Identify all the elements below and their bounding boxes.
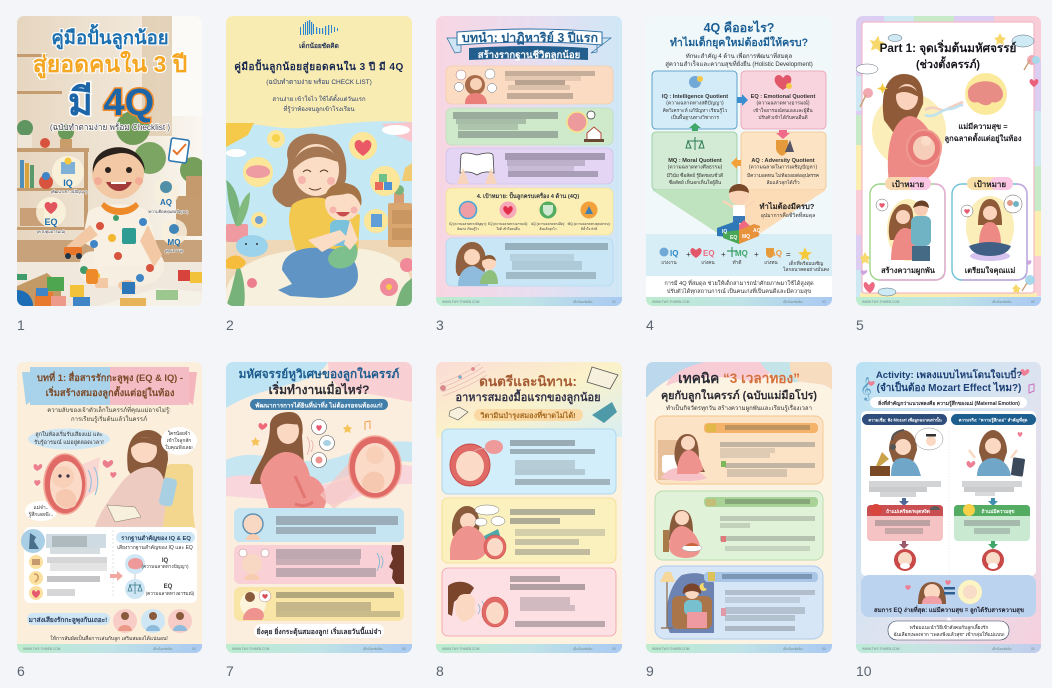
footer: 00 xyxy=(402,647,406,651)
MQ badge: (คุณธรรม) xyxy=(165,248,184,254)
title: เริ่มทำงานเมื่อไหร่? xyxy=(269,381,369,397)
page numbers: 8 xyxy=(436,663,444,679)
fetus in womb xyxy=(320,436,401,509)
illustration scene xyxy=(226,121,414,306)
title: ทำไมเด็กยุคใหม่ต้องมีให้ครบ? xyxy=(670,35,808,50)
footer: WWW.TWY-THWEB.COM xyxy=(862,300,900,304)
footer: WWW.TWY-THWEB.COM xyxy=(652,647,690,651)
panel 4: 4Q goals: คิดเก่ง เรียนรู้ไว xyxy=(457,227,479,231)
decorative notes xyxy=(860,369,1034,401)
white note: การมี 4Q ที่สมดุล ช่วยให้เด็กสามารถนำศักยภาพมาใช้ได้สูงสุด xyxy=(664,279,814,287)
page 6: chapter 1 EQ and IQ xyxy=(17,362,202,653)
MQ badge: MQ xyxy=(168,238,180,247)
title: คู่มือปั้นลูกน้อย xyxy=(51,24,169,50)
left mother with gramophone xyxy=(870,428,943,476)
equation: EQ xyxy=(703,249,715,258)
fetus xyxy=(34,454,116,514)
title: (จำเป็นต้อง Mozart Effect ไหม?) xyxy=(877,380,1021,394)
speech bubbles: รู้สึกเลยจ๊ะ.. xyxy=(28,511,53,518)
goal card: bonding: สร้างความผูกพัน xyxy=(881,266,936,276)
page numbers: 3 xyxy=(436,317,444,333)
page 10: activity lullaby xyxy=(856,362,1041,653)
equation: + xyxy=(754,250,759,259)
title ribbon: เริ่มสร้างสมองลูกตั้งแต่อยู่ในท้อง xyxy=(46,385,175,399)
footer: 00 xyxy=(1031,647,1035,651)
comparison panel: ความจริง: "ความรู้สึกแม่" สำคัญที่สุด xyxy=(959,416,1028,424)
EQ badge: (ควบคุมอารมณ์) xyxy=(37,229,66,235)
child on cube: IQ xyxy=(722,229,727,235)
page numbers: 5 xyxy=(856,317,864,333)
IQ box: IQ : Intelligence Quotient xyxy=(662,94,728,100)
equation: = xyxy=(786,250,791,259)
subtitle pill xyxy=(870,397,1027,408)
description: ทักษะสำคัญ 4 ด้าน เพื่อการพัฒนาที่สมดุล xyxy=(686,52,793,60)
title: อาหารสมองมื้อแรกของลูกน้อย xyxy=(455,389,601,405)
title: มหัศจรรย์หูวิเศษของลูกในครรภ์ xyxy=(239,366,400,382)
call to action xyxy=(27,609,192,633)
AQ box: มีความอดทน ไม่ท้อถอยต่ออุปสรรค xyxy=(747,172,819,179)
equation box xyxy=(861,575,1036,617)
title: (ช่วงตั้งครรภ์) xyxy=(916,56,980,71)
page numbers: 1 xyxy=(17,317,25,333)
why all: อุปมาการคือชีวิตที่สมดุล xyxy=(761,212,815,219)
call to action: มาส่งเสียงรักกะลูพุงกันเถอะ! xyxy=(29,616,107,625)
goal card: prepare: เตรียมใจคุณแม่ xyxy=(965,266,1015,275)
panel 3 xyxy=(446,148,613,184)
equation box: สมการ EQ ง่ายที่สุด: แม่มีความสุข = ลูกได้รับสารความสุข xyxy=(874,605,1024,615)
title: มี 4Q xyxy=(68,82,154,124)
title banner xyxy=(447,29,611,62)
panel 4: 4Q goals: 4. เป้าหมาย: ปั้นลูกครบเครื่อง 4 ด้าน (4Q) xyxy=(477,191,579,201)
AQ badge: AQ xyxy=(160,198,172,207)
MQ badge xyxy=(164,219,187,254)
MQ box: MQ : Moral Quotient xyxy=(668,158,722,164)
pregnant mother xyxy=(250,412,326,518)
AQ box: (ความฉลาดในการเผชิญปัญหา) xyxy=(749,164,817,170)
comparison panel xyxy=(861,411,1036,578)
title xyxy=(33,24,187,124)
row 3 xyxy=(234,587,404,621)
AQ box: AQ : Adversity Quotient xyxy=(751,158,815,164)
footer: WWW.TWY-THWEB.COM xyxy=(652,300,690,304)
footer: WWW.TWY-THWEB.COM xyxy=(442,300,480,304)
speech bubbles xyxy=(25,427,197,521)
logo waveform xyxy=(300,20,338,35)
panel 5 xyxy=(446,238,613,286)
description: สานง่าย เข้าใจไว ใช้ได้ตั้งแต่วันแรก xyxy=(272,93,366,103)
right happy mother xyxy=(966,430,1025,477)
icon: checklist xyxy=(168,138,189,163)
IQ box: เป็นพื้นฐานทางวิชาการ xyxy=(671,113,719,121)
footer: WWW.TWY-THWEB.COM xyxy=(23,647,61,651)
equation: ทำดี xyxy=(733,259,741,266)
mother in armchair xyxy=(95,430,195,528)
row 2 xyxy=(234,545,404,584)
AQ badge xyxy=(148,179,189,215)
callout: พร้อมแนะนำวิธีเข้าสังคมกับลูกเลี้ยงรัก xyxy=(910,623,988,631)
page numbers: 10 xyxy=(856,663,872,679)
morning panel xyxy=(655,416,823,484)
footer: เด็กน้อยชัดคิด xyxy=(153,645,172,651)
IQ badge: IQ xyxy=(63,178,73,188)
footer: 00 xyxy=(612,647,616,651)
bottom band xyxy=(646,234,832,276)
intro text: การเรียนรู้เริ่มต้นแล้วในครรภ์ xyxy=(71,415,147,423)
speech bubbles: รับรู้อารมณ์ แม่อยู่ตลอดเวลา! xyxy=(34,439,104,446)
panel 1 xyxy=(442,429,616,494)
pregnant mother and brain xyxy=(872,73,1007,182)
closing pill xyxy=(254,624,384,638)
MQ box: มีวินัย ซื่อสัตย์ รู้ผิดชอบชั่วดี xyxy=(667,172,723,179)
happy mom caption: ลูกฉลาดตั้งแต่อยู่ในท้อง xyxy=(945,132,1022,144)
page 1: cover with baby xyxy=(17,16,206,306)
page 4: what is 4Q xyxy=(646,16,832,306)
title banner: สร้างรากฐานชีวิตลูกน้อย xyxy=(478,49,580,62)
mother hugging child xyxy=(272,134,362,298)
info panel: รากฐานสำคัญของ IQ & EQ xyxy=(121,534,191,542)
callout xyxy=(888,617,1009,640)
title: คู่มือปั้นลูกน้อยสู่ยอดคนใน 3 ปี มี 4Q xyxy=(234,59,404,74)
footer: 00 xyxy=(822,300,826,304)
title: สู่ยอดคนใน 3 ปี xyxy=(33,50,187,79)
page numbers: 4 xyxy=(646,317,654,333)
description: ที่รู้ว่าท้องจนลูกเข้าโรงเรียน xyxy=(283,105,355,113)
footer xyxy=(436,297,622,306)
title xyxy=(670,20,808,50)
equation: + xyxy=(721,250,726,259)
page 9: three golden times xyxy=(646,362,832,653)
title: ดนตรีและนิทาน: xyxy=(479,374,577,389)
MQ box: (ความฉลาดทางศีลธรรม) xyxy=(668,164,723,170)
subtitle: (ฉบับทำตามง่าย พร้อม Checklist ) xyxy=(50,123,170,132)
equation: + xyxy=(686,250,691,259)
subtitle pill: พัฒนาการการได้ยินที่น่าทึ่ง ไม่ต้องรอจนท้องแก่! xyxy=(254,400,383,410)
IQ box: คิดวิเคราะห์ แก้ปัญหา เรียนรู้ไว xyxy=(663,107,728,114)
page numbers: 9 xyxy=(646,663,654,679)
footer xyxy=(856,297,1041,306)
equation: เก่งคน xyxy=(701,260,715,266)
MQ box: ซื่อสัตย์ เห็นอกเห็นใจผู้อื่น xyxy=(669,178,722,186)
speech bubbles: เข้าใจลูกสัก xyxy=(167,437,191,444)
why all xyxy=(760,201,815,219)
IQ badge xyxy=(51,156,88,194)
AQ box: ล้มแล้วลุกได้เร็ว xyxy=(766,178,800,186)
music notes xyxy=(440,364,487,396)
panel 3 xyxy=(442,568,616,636)
title ribbon xyxy=(22,367,197,405)
equation: เก่งงาน xyxy=(661,260,677,266)
footer: เด็กน้อยชัดคิด xyxy=(992,645,1012,651)
icon bubbles xyxy=(243,130,400,233)
panel 4: 4Q goals xyxy=(446,188,613,235)
footer xyxy=(856,644,1041,653)
white note: ปรับตัวได้ทุกสถานการณ์ เป็นคนเก่งที่เป็นคนดีและมีความสุข xyxy=(667,287,811,295)
EQ box xyxy=(741,71,826,129)
night panel xyxy=(655,566,823,639)
goal card: prepare xyxy=(952,177,1027,280)
page numbers: 7 xyxy=(226,663,234,679)
footer: 00 xyxy=(822,647,826,651)
equation: MQ xyxy=(735,249,748,258)
toy blocks xyxy=(17,270,202,306)
info panel: IQ xyxy=(162,558,168,564)
panel 2 xyxy=(442,498,616,563)
subtitle pill xyxy=(250,399,388,410)
row 1 xyxy=(234,508,404,542)
AQ box xyxy=(741,132,826,190)
child on cube: MQ xyxy=(742,234,750,240)
decorations xyxy=(856,33,1040,296)
funnel xyxy=(652,190,826,236)
happy mom caption: แม่มีความสุข = xyxy=(958,122,1008,131)
EQ box: (ความฉลาดทางอารมณ์) xyxy=(756,100,810,106)
footer: เด็กน้อยชัดคิด xyxy=(573,298,592,304)
footer: เด็กน้อยชัดคิด xyxy=(783,645,802,651)
subtitle pill: วิตามินบำรุงสมองที่ขาดไม่ได้! xyxy=(479,409,576,420)
page 8: music and stories xyxy=(436,362,622,653)
page 5: part 1 beginning xyxy=(856,16,1041,306)
equation: เก่งทน xyxy=(764,260,778,266)
title: เทคนิค “3 เวลาทอง” xyxy=(678,371,800,386)
panel 4: 4Q goals: มีน้ำใจ ทำดี xyxy=(581,226,597,231)
intro text: ความลับของเจ้าตัวเล็กในครรภ์ที่คุณแม่อาจไม่รู้: xyxy=(47,405,171,414)
panel 4: 4Q goals: AQ (ความฉลาดทางอึด): xyxy=(531,222,565,226)
MQ box xyxy=(652,132,737,190)
IQ box: (ความฉลาดทางสติปัญญา) xyxy=(666,100,724,106)
panel 4: 4Q goals: ล้มแล้วลุกไว xyxy=(539,227,557,232)
title ribbon: บทที่ 1: สื่อสารรักกะลูพุง (EQ & IQ) - xyxy=(37,371,183,384)
title: 4Q คืออะไร? xyxy=(704,20,774,35)
footer: WWW.TWY-THWEB.COM xyxy=(862,647,900,651)
footer: เด็กน้อยชัดคิด xyxy=(783,298,802,304)
EQ badge: EQ xyxy=(44,217,58,227)
why all: ทำไมต้องมีครบ? xyxy=(760,201,815,211)
bottom note: ให้การสัมผัสเป็นสื่อการเล่นกับลูก เสริมสมองได้แน่นอน! xyxy=(50,634,168,642)
book icons xyxy=(449,367,618,423)
panel 2 xyxy=(446,108,613,145)
footer: WWW.TWY-THWEB.COM xyxy=(232,647,270,651)
panel 4: 4Q goals: MQ (ความฉลาดทางคุณธรรม): xyxy=(568,222,611,227)
blurred text xyxy=(869,481,1022,497)
footer: 00 xyxy=(1031,300,1035,304)
brand name: เด็กน้อยชัดคิด xyxy=(299,41,339,50)
footer: เด็กน้อยชัดคิด xyxy=(573,645,592,651)
title: คุยกับลูกในครรภ์ (ฉบับแม่มือโปร) xyxy=(661,388,817,403)
white frame xyxy=(862,22,1034,293)
description: สู่ความสำเร็จและความสุขที่ยั่งยืน (Holistic Development) xyxy=(665,59,813,68)
EQ badge xyxy=(36,197,66,235)
child on cube: AQ xyxy=(753,228,761,234)
right path: ถ้าแม่มีความสุข xyxy=(981,508,1014,515)
subtitle: ทำเป็นกิจวัตรทุกวัน สร้างความผูกพันและเรียนรู้เรื่องเวลา xyxy=(666,403,812,412)
footer xyxy=(17,644,202,653)
footer xyxy=(226,644,412,653)
page numbers xyxy=(17,317,872,679)
baby xyxy=(64,147,164,291)
equation: AQ xyxy=(770,249,782,258)
panel 4: 4Q goals: ใจดี เข้าใจคนอื่น xyxy=(496,226,520,231)
info panel: เสียงรากฐานสำคัญของ IQ และ EQ xyxy=(117,544,193,551)
white note xyxy=(646,276,832,297)
EQ box: ปรับตัวเข้าได้กับคนอื่นดี xyxy=(758,114,808,121)
closing pill: ยิ่งคุย ยิ่งกระตุ้นสมองลูก! เริ่มเลยวันนี้แม่จ๋า xyxy=(257,626,382,637)
info panel: (ความฉลาดทางปัญญา) xyxy=(141,563,189,570)
subtitle: (ฉบับทำตามง่าย พร้อม CHECK LIST) xyxy=(266,78,372,86)
child on cube xyxy=(717,184,761,244)
footer xyxy=(646,644,832,653)
title: Activity: เพลงแบบไหนโดนใจเบบี๋? xyxy=(876,368,1022,381)
subtitle pill xyxy=(474,409,583,421)
cycle arrows xyxy=(689,94,790,169)
panel 4: 4Q goals: IQ (ความฉลาดทางปัญญา): xyxy=(449,222,487,226)
left path xyxy=(867,498,943,571)
page 7: fetal hearing xyxy=(226,362,412,653)
child on cube: EQ xyxy=(730,235,737,241)
page numbers: 6 xyxy=(17,663,25,679)
speech bubbles: ใครน้อยจ้า xyxy=(168,430,191,437)
footer xyxy=(436,644,622,653)
page numbers: 2 xyxy=(226,317,234,333)
info panel: EQ xyxy=(164,584,173,590)
equation: IQ xyxy=(670,249,678,258)
equation xyxy=(660,247,829,273)
equation: เด็กที่พร้อมเผชิญ xyxy=(789,259,823,267)
panel 4: 4Q goals: EQ (ความฉลาดทางอารมณ์): xyxy=(488,222,528,226)
footer: เด็กน้อยชัดคิด xyxy=(992,298,1012,304)
AQ badge: (ความยืดหยุ่นต่อปัญหา) xyxy=(148,209,189,215)
goal card: prepare: เป้าหมาย xyxy=(974,179,1006,189)
footer: WWW.TWY-THWEB.COM xyxy=(442,647,480,651)
left path: ถ้าแม่เครียด/หงุดหงิด xyxy=(886,508,930,515)
right path xyxy=(954,498,1030,571)
footer: 00 xyxy=(612,300,616,304)
subtitle pill: สิ่งที่สำคัญกว่าแนวเพลงคือ ความรู้สึกของแม่ (Maternal Emotion) xyxy=(878,399,1020,408)
speech bubbles: ใบคุณฟังเลย! xyxy=(165,444,193,451)
equation: โลกอนาคตอย่างมั่นคง xyxy=(783,266,829,273)
footer: 00 xyxy=(192,647,196,651)
speech bubbles: แม่จ๋า.. xyxy=(33,504,49,511)
callout: ฉันเลือกเพลงจาก "เพลงฟังแล้วสุข" เข้ากลุ่มให้แม่แบบ! xyxy=(893,631,1005,638)
EQ box: EQ : Emotional Quotient xyxy=(751,94,815,100)
footer xyxy=(646,297,832,306)
panel 1 xyxy=(446,66,613,104)
IQ box xyxy=(652,71,737,129)
sound bubbles xyxy=(251,420,370,468)
goal card: bonding: เป้าหมาย xyxy=(892,179,924,189)
title: Part 1: จุดเริ่มต้นมหัศจรรย์ xyxy=(880,39,1016,56)
goal card: bonding xyxy=(870,177,945,280)
comparison panel: ความเชื่อ: ฟัง Mozart เพื่อลูกฉลาดเท่านั้น xyxy=(868,416,942,424)
IQ badge: (พัฒนาเชาวน์ปัญญา) xyxy=(51,189,88,194)
title banner: บทนำ: ปาฏิหาริย์ 3 ปีแรก xyxy=(462,30,598,46)
info panel: (ความฉลาดทางอารมณ์) xyxy=(146,590,195,596)
footer: เด็กน้อยชัดคิด xyxy=(363,645,382,651)
info panel xyxy=(21,527,197,603)
speech bubbles: ลูกในท้องเริ่มรับเสียงแม่ และ xyxy=(35,430,103,438)
page 2: mother and child cover xyxy=(226,16,414,306)
page 3: intro, 3 golden years xyxy=(436,16,622,306)
EQ box: เข้าใจอารมณ์ตนเองและผู้อื่น xyxy=(753,107,813,114)
noon panel xyxy=(655,491,823,560)
decorative notes: 𝄞 xyxy=(860,378,872,401)
